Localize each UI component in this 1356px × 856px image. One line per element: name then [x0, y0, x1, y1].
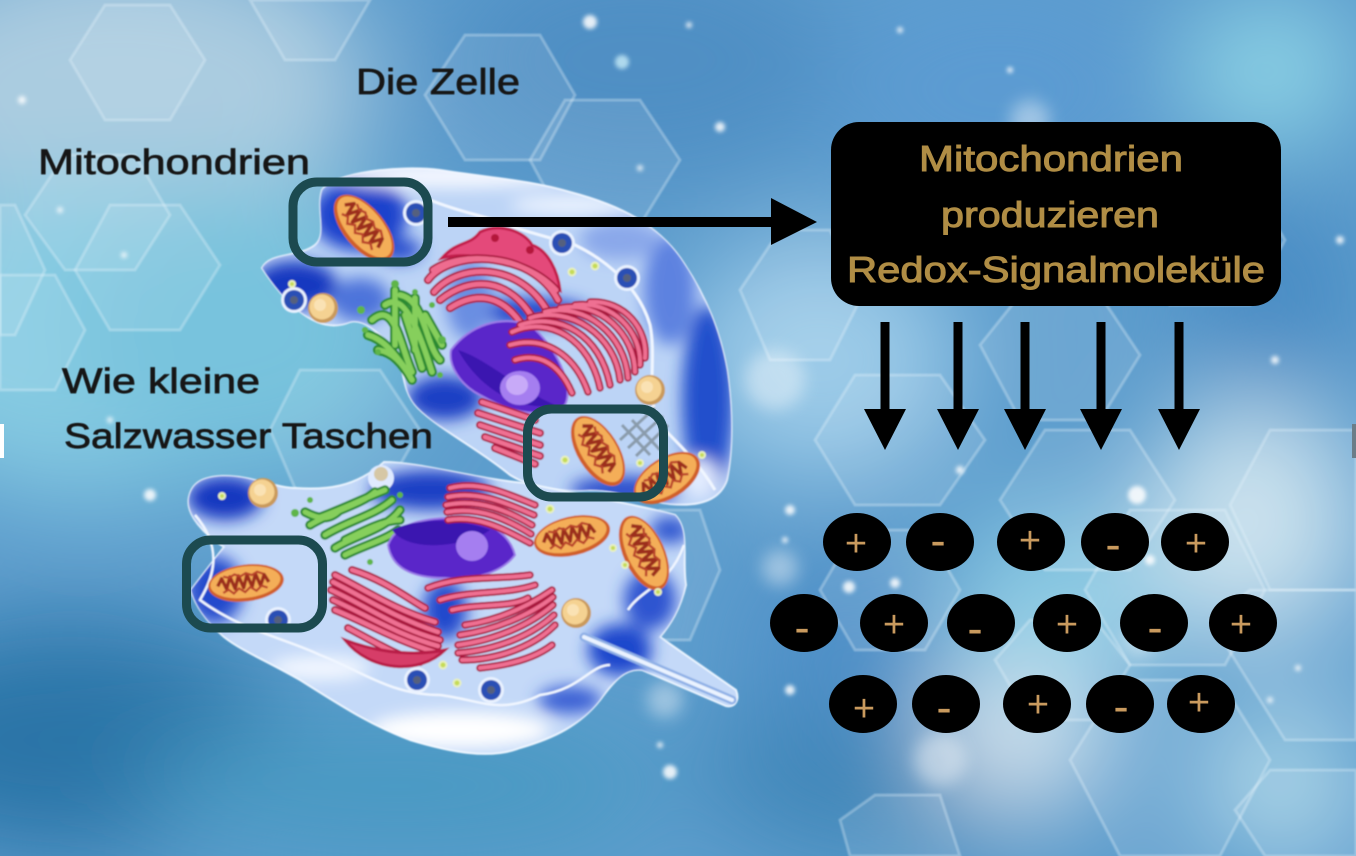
ions grid: -: [1113, 680, 1129, 732]
grey filaments: [620, 408, 668, 456]
golgi red lower: [478, 402, 540, 464]
vesicles: [265, 607, 504, 703]
callout box: Redox-Signalmoleküle: [847, 249, 1265, 290]
nucleus: [451, 321, 568, 413]
highlight box: middle mitochondrion: [528, 409, 664, 497]
ions grid: +: [853, 688, 875, 730]
ions grid: +: [1019, 520, 1041, 562]
label: Mitochondrien: Mitochondrien: [38, 143, 310, 182]
edge marks: [0, 424, 4, 458]
inner membrane: [430, 200, 715, 490]
nucleus lower: [388, 518, 515, 578]
green dots upper: [289, 262, 705, 466]
ions grid: +: [1188, 682, 1210, 724]
ions grid: +: [1185, 523, 1207, 565]
label: Wie kleine Salzwasser Taschen: Wie kleine: [62, 362, 260, 401]
gold vesicles lower: [248, 478, 591, 628]
ions grid: -: [930, 514, 946, 566]
green dots lower: [219, 493, 661, 686]
golgi red left: [331, 570, 445, 667]
ions grid: +: [1027, 684, 1049, 726]
highlight box: top mitochondrion: [293, 182, 428, 262]
ions grid: -: [936, 681, 952, 733]
cell illustration: lower cell: [187, 462, 737, 754]
flagellum: [584, 637, 732, 700]
highlight box: lower mitochondrion: [186, 540, 322, 628]
callout box: [831, 122, 1281, 306]
vesicles: [281, 200, 640, 313]
golgi red top: [428, 228, 560, 322]
ions grid: [770, 513, 1277, 733]
ions grid: +: [883, 604, 905, 646]
ions grid: +: [1230, 604, 1252, 646]
golgi red right: [510, 302, 645, 393]
label: Wie kleine Salzwasser Taschen: Salzwasser Taschen: [64, 417, 433, 456]
ions grid: -: [1147, 601, 1163, 653]
callout box: Mitochondrien: [919, 138, 1183, 179]
label: Die Zelle: Die Zelle: [356, 61, 520, 102]
golgi green lower: [291, 490, 403, 565]
ions grid: -: [1105, 518, 1121, 570]
golgi red center and right: [428, 486, 555, 668]
ions grid: +: [1056, 604, 1078, 646]
inner membrane: [195, 515, 684, 705]
mitochondria upper cell: [323, 184, 709, 515]
mitochondria lower cell: [206, 508, 679, 606]
arrows: downward: [864, 322, 1200, 450]
arrow: mitochondria to box: [448, 198, 817, 245]
ions grid: -: [794, 601, 810, 653]
cell illustration: upper cell: [253, 164, 734, 515]
callout box: produzieren: [941, 194, 1159, 235]
label: Wie kleine Salzwasser Taschen: [62, 362, 433, 456]
golgi green: [357, 280, 446, 380]
ions grid: -: [967, 602, 983, 654]
vesicles gold upper: [308, 293, 665, 405]
ions grid: +: [845, 523, 867, 565]
